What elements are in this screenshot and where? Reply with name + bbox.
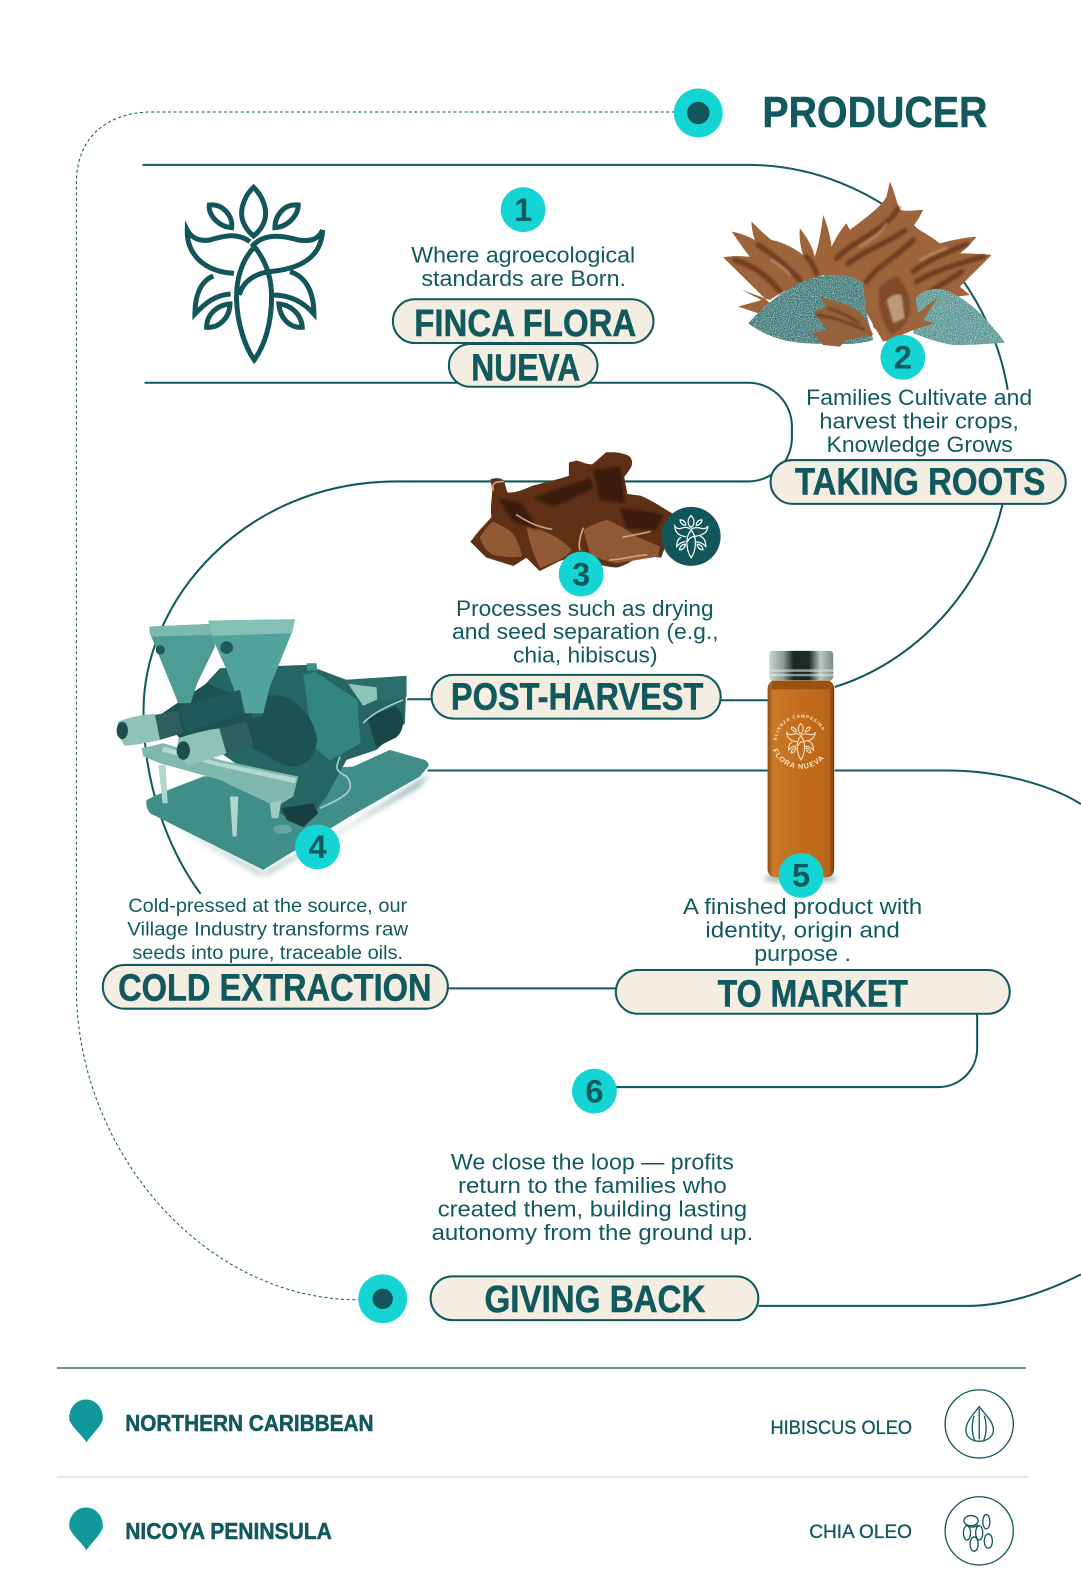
pill: finca flora: FINCA FLORA bbox=[414, 302, 636, 344]
pill: nueva: NUEVA bbox=[471, 347, 580, 389]
region label: NICOYA PENINSULA bbox=[125, 1518, 332, 1544]
pill: to market bbox=[616, 970, 1010, 1015]
step number 4 bbox=[295, 824, 340, 869]
description 2: Knowledge Grows bbox=[827, 432, 1013, 457]
legs bbox=[158, 765, 168, 803]
connector: cold extraction to market bbox=[448, 987, 616, 989]
front bud bbox=[812, 297, 873, 347]
step number 2: 2 bbox=[894, 339, 912, 375]
producer title: PRODUCER bbox=[762, 88, 987, 137]
step 3: post-harvest bbox=[432, 552, 721, 719]
teal leaves bbox=[748, 275, 873, 344]
step number 4: 4 bbox=[309, 829, 327, 865]
step 4: cold extraction bbox=[103, 824, 448, 1009]
description 6: return to the families who bbox=[458, 1173, 727, 1198]
petal shading bbox=[735, 208, 983, 292]
gear housing bbox=[303, 672, 361, 761]
product label: CHIA OLEO bbox=[809, 1522, 912, 1543]
icon: map pin bbox=[69, 1507, 103, 1550]
description 2: Families Cultivate and bbox=[806, 385, 1032, 410]
bottle body bbox=[768, 681, 834, 877]
step number 1 bbox=[501, 187, 546, 232]
region label: NORTHERN CARIBBEAN bbox=[125, 1410, 374, 1436]
description 4 bbox=[127, 895, 409, 964]
bottle label bbox=[772, 714, 824, 769]
connector: post-harvest to machine bbox=[407, 698, 432, 700]
description 4: seeds into pure, traceable oils. bbox=[132, 942, 403, 964]
hopper right bbox=[208, 619, 295, 713]
bottle shadow bbox=[764, 873, 838, 884]
connector: machine to bottle bbox=[428, 770, 768, 772]
row: northern caribbean bbox=[69, 1390, 1013, 1458]
step number 2 bbox=[880, 335, 925, 380]
step 5: to market bbox=[616, 853, 1010, 1015]
description 3 bbox=[452, 596, 719, 668]
step 6: giving back bbox=[358, 1069, 758, 1323]
description 3: chia, hibiscus) bbox=[513, 643, 658, 668]
image: dried hibiscus bbox=[472, 453, 673, 570]
icon: closing dot bbox=[358, 1274, 407, 1323]
heading: producer bbox=[674, 88, 987, 137]
step number 1: 1 bbox=[514, 192, 532, 228]
step number 5: 5 bbox=[792, 858, 810, 894]
product label: HIBISCUS OLEO bbox=[771, 1418, 912, 1439]
connector: bottle to right edge bbox=[835, 771, 1081, 804]
motor bbox=[343, 676, 407, 704]
icon: map pin bbox=[69, 1400, 103, 1442]
logo: flora nueva bbox=[187, 187, 323, 360]
icon: hibiscus seed bbox=[945, 1390, 1013, 1458]
connector: post-harvest to bottle bbox=[721, 699, 768, 701]
switch box and cable bbox=[282, 803, 318, 827]
description 3: and seed separation (e.g., bbox=[452, 619, 719, 644]
dotted loop connector bbox=[76, 112, 675, 1300]
trough bbox=[142, 743, 298, 807]
description 2 bbox=[806, 385, 1032, 457]
base plate bbox=[146, 750, 429, 870]
step number 3 bbox=[559, 552, 604, 596]
row: nicoya peninsula bbox=[69, 1497, 1013, 1565]
step number 6: 6 bbox=[585, 1073, 604, 1109]
icon: chia seeds bbox=[945, 1497, 1013, 1565]
pill: giving back: GIVING BACK bbox=[485, 1278, 705, 1320]
connector: taking roots to bottle bbox=[835, 504, 1003, 687]
description 6: We close the loop — profits bbox=[451, 1150, 734, 1175]
description 5: A finished product with bbox=[683, 894, 922, 919]
description 5: identity, origin and bbox=[705, 917, 900, 942]
step 1: finca flora nueva bbox=[393, 187, 653, 389]
description 1: Where agroecological bbox=[411, 243, 635, 268]
pill: cold extraction: COLD EXTRACTION bbox=[118, 967, 432, 1009]
icon: logo badge bbox=[662, 507, 721, 566]
rear barrel bbox=[178, 690, 245, 732]
pill: taking roots: TAKING ROOTS bbox=[795, 461, 1045, 503]
description 6: autonomy from the ground up. bbox=[432, 1220, 753, 1245]
image: oil press machine bbox=[117, 619, 430, 875]
step 2: taking roots bbox=[771, 335, 1066, 504]
pill: to market: TO MARKET bbox=[718, 973, 908, 1015]
step number 5 bbox=[779, 853, 823, 898]
pill: post-harvest: POST-HARVEST bbox=[451, 675, 703, 717]
image: oil bottle bbox=[762, 650, 840, 885]
bottle cap bbox=[769, 651, 833, 680]
connector: giving back to right edge bbox=[758, 1274, 1081, 1306]
description 5: purpose . bbox=[754, 941, 851, 966]
description 1 bbox=[411, 243, 635, 291]
hibiscus petals bbox=[723, 182, 991, 342]
description 3: Processes such as drying bbox=[456, 596, 714, 621]
image: fresh hibiscus with leaves bbox=[723, 182, 1005, 347]
step number 3: 3 bbox=[572, 556, 590, 592]
description 6 bbox=[432, 1150, 753, 1245]
front barrel bbox=[247, 710, 290, 750]
machine shadow bbox=[157, 773, 430, 875]
description 4: Cold-pressed at the source, our bbox=[128, 895, 408, 917]
connector: to market to step 6 bbox=[616, 1014, 977, 1087]
description 1: standards are Born. bbox=[421, 266, 626, 291]
connector: finca to post-harvest bbox=[144, 383, 792, 894]
bottle label: FLORA NUEVA bbox=[772, 748, 824, 769]
description 6: created them, building lasting bbox=[438, 1196, 747, 1221]
description 2: harvest their crops, bbox=[819, 409, 1019, 434]
center bud bbox=[867, 273, 938, 342]
step number 6 bbox=[572, 1069, 617, 1114]
description 5 bbox=[683, 894, 922, 966]
body mass bbox=[193, 665, 407, 827]
connector: top curve bbox=[143, 165, 1008, 390]
hopper left bbox=[149, 624, 215, 703]
bottle label: ALIANZA CAMPESINA bbox=[774, 714, 824, 740]
icon: producer dot bbox=[674, 89, 723, 137]
description 4: Village Industry transforms raw bbox=[127, 918, 409, 940]
